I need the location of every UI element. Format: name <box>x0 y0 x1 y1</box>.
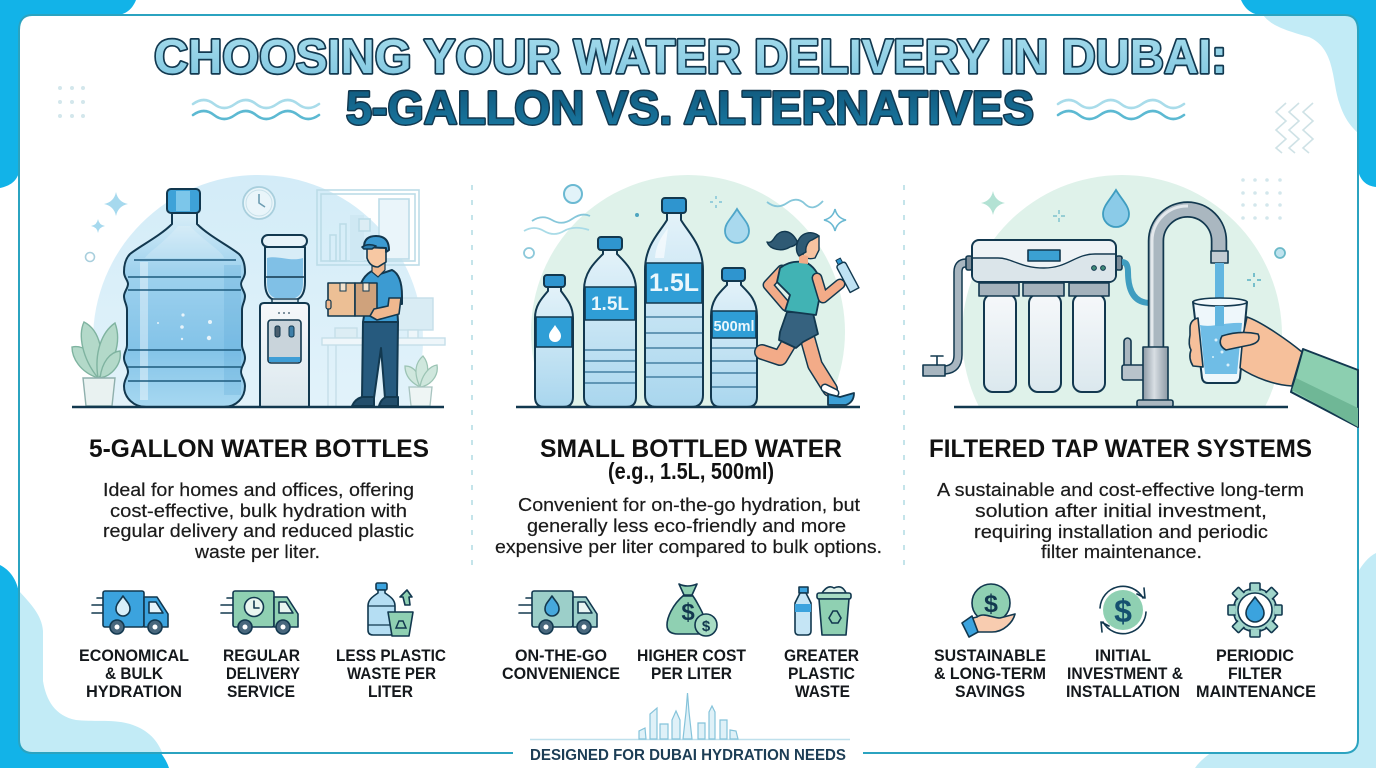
icon: money bag with coin <box>667 584 717 636</box>
label: SUSTAINABLE <box>934 646 1046 665</box>
label: ON-THE-GO <box>515 646 607 665</box>
description: Ideal for homes and offices, offering <box>103 479 414 500</box>
description <box>495 494 882 557</box>
office window with chart <box>317 190 419 265</box>
backdrop circle <box>531 175 845 406</box>
label: INITIAL <box>1095 646 1151 665</box>
footer: Dubai skyline <box>530 693 850 740</box>
ground line <box>516 406 860 408</box>
illustration: filter system, faucet and hand with glass <box>922 175 1359 428</box>
label: WASTE PER <box>347 664 436 683</box>
runner with bottle <box>762 231 859 405</box>
feature: initial investment and installation <box>1066 586 1183 701</box>
decorative sparkles, drop and dots <box>981 178 1285 287</box>
description: cost-effective, bulk hydration with <box>110 500 407 521</box>
faucet <box>1122 206 1228 407</box>
panel: small bottled water <box>495 175 882 701</box>
blue connecting tube <box>1122 262 1149 303</box>
label <box>784 646 859 701</box>
label <box>934 646 1046 701</box>
label <box>1196 646 1316 701</box>
backdrop circle <box>962 175 1282 406</box>
label <box>637 646 747 683</box>
500ml bottle <box>711 268 757 407</box>
water cooler <box>260 235 309 407</box>
label: WASTE <box>795 682 850 701</box>
label <box>1066 646 1183 701</box>
description: Convenient for on-the-go hydration, but <box>518 494 860 515</box>
heading: (e.g., 1.5L, 500ml) <box>608 458 774 484</box>
description: filter maintenance. <box>1041 541 1202 562</box>
feature: periodic filter maintenance <box>1196 583 1316 701</box>
water stream <box>1215 263 1224 325</box>
title waves right <box>1058 100 1184 119</box>
footer tagline: DESIGNED FOR DUBAI HYDRATION NEEDS <box>530 747 846 764</box>
decorative waves, bubbles and sparkles <box>524 185 846 258</box>
label: PERIODIC <box>1216 646 1294 665</box>
water supply pipe and valve <box>923 256 1122 376</box>
large 5-gallon bottle <box>124 189 245 407</box>
label: GREATER <box>784 646 859 665</box>
feature: economical and bulk hydration <box>79 591 189 701</box>
icon: bottle and overflowing bin <box>795 587 851 635</box>
description: A sustainable and cost-effective long-term <box>937 479 1304 500</box>
icon: green truck with clock <box>221 591 298 634</box>
icon: dollar coin with circular arrows: $ <box>1114 593 1132 629</box>
ground line <box>72 406 444 408</box>
1.5L bottle medium: 1.5L <box>591 294 629 315</box>
heading: SMALL BOTTLED WATER <box>540 435 842 463</box>
label: & LONG-TERM <box>934 664 1046 683</box>
label <box>223 646 301 701</box>
label: FILTER <box>1228 664 1282 683</box>
backdrop circle <box>94 175 423 406</box>
small bottle with drop <box>535 275 573 407</box>
feature: on-the-go convenience <box>502 591 620 683</box>
feature: greater plastic waste <box>784 587 859 701</box>
clock <box>243 187 275 219</box>
delivery man with box <box>326 236 402 406</box>
label: PLASTIC <box>788 664 855 683</box>
feature: sustainable and long-term savings <box>934 584 1046 701</box>
description: solution after initial investment, <box>975 500 1267 521</box>
icon: money bag with coin: $ <box>681 599 695 626</box>
1.5L bottle medium <box>584 237 636 407</box>
icon: gear with water drop <box>1228 583 1282 637</box>
label: & BULK <box>105 664 164 683</box>
label: HIGHER COST <box>637 646 747 665</box>
panel: 5-gallon water bottles <box>72 175 446 701</box>
description <box>103 479 414 562</box>
label <box>502 646 620 683</box>
description: regular delivery and reduced plastic <box>103 520 414 541</box>
description <box>937 479 1304 562</box>
hand <box>1189 317 1358 427</box>
sparkles <box>86 192 128 262</box>
description: requiring installation and periodic <box>974 521 1268 542</box>
decorative zigzags top right <box>1276 103 1313 153</box>
decorative dot grid top left <box>58 86 85 118</box>
filter cartridges <box>979 283 1109 392</box>
heading: 5-GALLON WATER BOTTLES <box>89 435 429 463</box>
heading: FILTERED TAP WATER SYSTEMS <box>929 435 1312 463</box>
label: DELIVERY <box>226 664 301 683</box>
label: LESS PLASTIC <box>336 646 446 665</box>
icon: muted truck with drop <box>519 591 597 634</box>
panel: filtered tap water systems <box>923 175 1358 701</box>
1.5L bottle large: 1.5L <box>649 269 699 297</box>
icon: hand holding coin: $ <box>984 590 998 618</box>
filter head unit <box>972 240 1116 282</box>
desk and monitor <box>322 298 445 407</box>
label: CONVENIENCE <box>502 664 620 683</box>
column divider left <box>471 185 473 570</box>
description: generally less eco-friendly and more <box>527 515 846 536</box>
illustration: bottles and runner <box>516 175 860 408</box>
title <box>154 31 1227 134</box>
icon: blue truck with drop <box>92 591 168 634</box>
label: MAINTENANCE <box>1196 682 1316 701</box>
description: waste per liter. <box>194 541 320 562</box>
label: INVESTMENT & <box>1067 664 1183 683</box>
feature: less plastic waste per liter <box>336 583 446 701</box>
label: INSTALLATION <box>1066 682 1180 701</box>
label: HYDRATION <box>86 682 182 701</box>
plant left <box>72 322 120 406</box>
label <box>336 646 446 701</box>
label: LITER <box>368 682 413 701</box>
title waves left <box>193 100 319 119</box>
icon: money bag with coin: $ <box>702 618 711 635</box>
1.5L bottle large <box>645 198 703 407</box>
description: expensive per liter compared to bulk options. <box>495 536 882 557</box>
label: SERVICE <box>227 682 295 701</box>
icon: bottle, recycling bin and arrow <box>368 583 413 636</box>
title: 5-GALLON VS. ALTERNATIVES <box>346 81 1034 134</box>
heading <box>540 435 842 484</box>
title: CHOOSING YOUR WATER DELIVERY IN DUBAI: <box>154 31 1227 84</box>
illustration: 5-gallon bottle, cooler and delivery man <box>71 175 446 408</box>
column divider right <box>903 185 905 570</box>
ground line <box>954 406 1288 408</box>
plant right <box>405 356 437 406</box>
500ml bottle: 500ml <box>713 319 755 335</box>
feature: higher cost per liter <box>637 584 747 683</box>
label <box>79 646 189 701</box>
label: ECONOMICAL <box>79 646 189 665</box>
label: PER LITER <box>651 664 732 683</box>
feature: regular delivery service <box>221 591 301 701</box>
label: REGULAR <box>223 646 300 665</box>
label: SAVINGS <box>955 682 1025 701</box>
glass of water held by hand <box>1193 298 1247 383</box>
